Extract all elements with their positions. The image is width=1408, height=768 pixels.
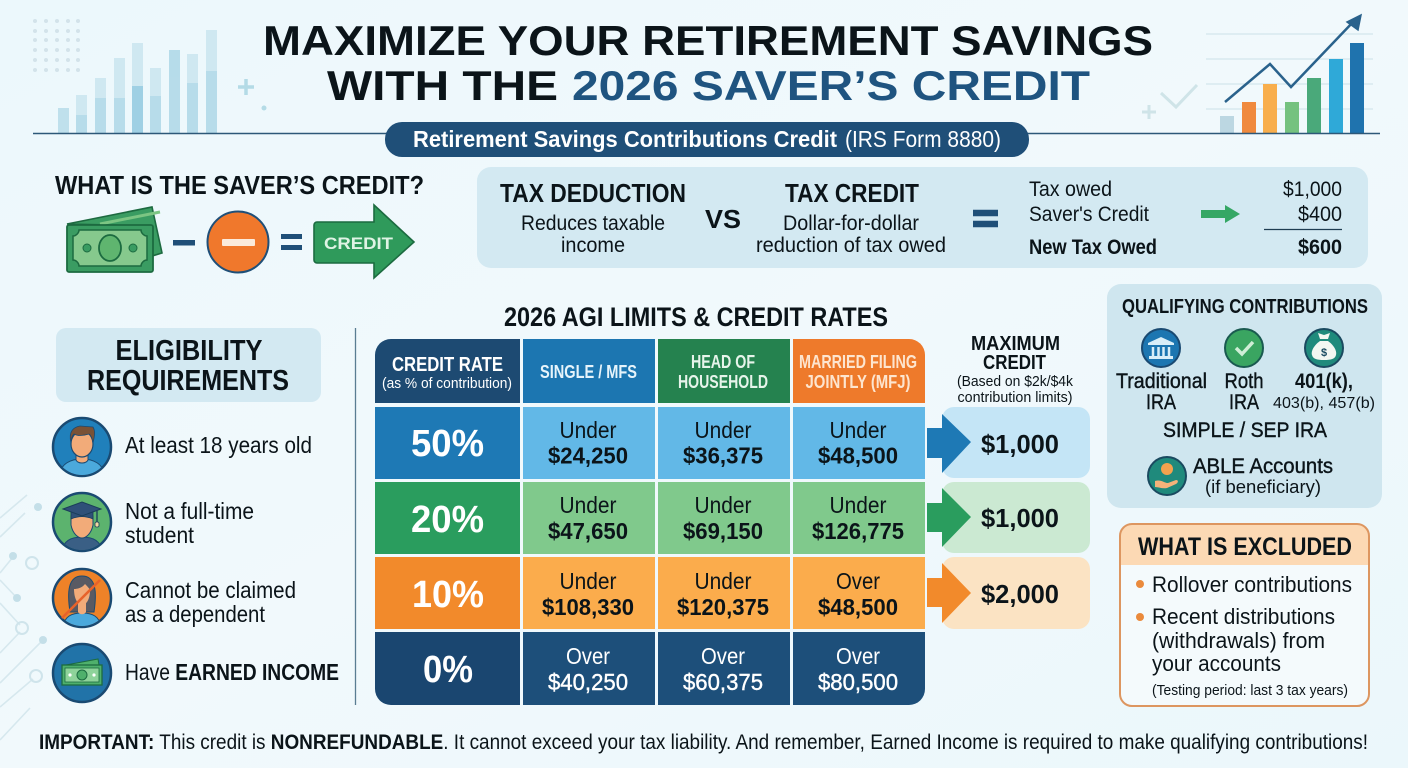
worked example: Saver's Credit: [1029, 203, 1149, 226]
header labels: MARRIED FILING: [799, 352, 917, 372]
maximum credit column heading: MAXIMUM: [971, 333, 1060, 355]
maximum credit: row 20%: $1,000: [981, 503, 1059, 533]
row: 20%: $126,775: [812, 518, 904, 544]
requirement: earned income: [53, 644, 339, 702]
maximum credit: row 50%: $1,000: [981, 429, 1059, 459]
worked example: Tax owed: [1029, 178, 1112, 201]
subtitle pill: (IRS Form 8880): [845, 126, 1001, 152]
header labels: CREDIT RATE: [392, 354, 503, 376]
worked example: [1029, 178, 1342, 259]
contribution labels: IRA: [1146, 391, 1176, 414]
header labels: HEAD OF: [691, 352, 755, 372]
row: 20%: [411, 492, 904, 544]
worked example: $400: [1298, 203, 1342, 226]
icon: money bag: [1305, 329, 1343, 367]
row: 10%: $120,375: [677, 594, 769, 620]
row: 0%: Over: [836, 643, 880, 669]
tax deduction: Reduces taxable: [521, 212, 665, 235]
maximum credit: row 10%: $2,000: [981, 579, 1059, 609]
exclusion list: [1136, 572, 1352, 699]
title: MAXIMIZE YOUR RETIREMENT SAVINGS: [263, 17, 1153, 64]
tax credit: reduction of tax owed: [756, 234, 946, 257]
contribution labels: IRA: [1229, 391, 1259, 414]
row: 20%: Under: [694, 492, 752, 518]
header labels: JOINTLY (MFJ): [806, 372, 910, 392]
row: 50%: Under: [694, 417, 752, 443]
panel: what is excluded: WHAT IS EXCLUDED: [1138, 533, 1352, 561]
panel heading: eligibility: ELIGIBILITY: [116, 335, 262, 367]
contribution labels: SIMPLE / SEP IRA: [1163, 419, 1327, 442]
row: 20%: Under: [830, 492, 887, 518]
tax deduction: income: [561, 234, 625, 257]
requirement: not a student: [53, 493, 254, 552]
tax deduction: [500, 178, 686, 257]
exclusion list: your accounts: [1152, 651, 1281, 676]
able accounts: [1193, 455, 1333, 497]
requirement: earned income: Have EARNED INCOME: [125, 659, 339, 685]
contribution labels: 403(b), 457(b): [1273, 395, 1375, 412]
table header row: [375, 339, 925, 403]
row: 0%: 0%: [423, 649, 473, 691]
maximum credit column heading: CREDIT: [983, 352, 1046, 374]
vs: VS: [705, 204, 741, 234]
exclusion list: Rollover contributions: [1152, 572, 1352, 597]
equals sign: [973, 213, 998, 224]
icon: dependent crossed out: [53, 569, 111, 628]
subtitle pill: Retirement Savings Contributions Credit: [413, 126, 837, 152]
row: 50%: [411, 417, 898, 468]
heading: what is the saver's credit: WHAT IS THE SAVER’S CREDIT?: [55, 170, 424, 200]
row: 50%: Under: [560, 417, 617, 443]
tax credit: TAX CREDIT: [785, 178, 919, 208]
icon: person: [53, 418, 111, 476]
tax deduction: TAX DEDUCTION: [500, 178, 686, 208]
icon: money bag: $: [1321, 347, 1327, 359]
row: 0%: [423, 643, 898, 695]
icon: credit arrow: CREDIT: [324, 234, 394, 253]
row: 10%: [412, 568, 898, 620]
maximum credit: row 20%: [927, 482, 1090, 553]
row: 10%: Under: [694, 568, 752, 594]
icon: bank: [1142, 329, 1180, 367]
icon: banknote: [53, 644, 111, 702]
row: 20%: $69,150: [683, 518, 763, 544]
subtitle pill: [385, 122, 1029, 157]
icon: minus sign: [173, 240, 195, 246]
equation icons: [67, 205, 414, 278]
icon: equals sign: [281, 236, 302, 248]
title: 2026 SAVER’S CREDIT: [572, 62, 1090, 109]
row: 10%: $108,330: [542, 594, 634, 620]
row: 10%: Under: [560, 568, 617, 594]
requirement: age: [53, 418, 312, 476]
contribution labels: Traditional: [1116, 370, 1207, 393]
icon: hand with coin: [1148, 457, 1186, 495]
vertical divider: [354, 328, 356, 705]
title: WITH THE: [327, 62, 558, 109]
maximum credit column heading: (Based on $2k/$4k: [957, 373, 1073, 390]
panel: tax deduction vs credit: [477, 167, 1368, 268]
able accounts: (if beneficiary): [1205, 477, 1321, 497]
decoration: faded bar chart left: [33, 19, 266, 134]
exclusion list: (Testing period: last 3 tax years): [1152, 682, 1348, 699]
title: [263, 17, 1153, 109]
row: 50%: Under: [830, 417, 887, 443]
worked example: $1,000: [1283, 178, 1342, 201]
header labels: HOUSEHOLD: [678, 372, 768, 392]
panel: what is excluded: [1120, 524, 1369, 706]
maximum credit column heading: contribution limits): [958, 389, 1073, 406]
row: 20%: 20%: [411, 499, 484, 541]
header labels: [382, 352, 917, 392]
requirement: age: At least 18 years old: [125, 432, 312, 458]
requirement: not a student: Not a full-time: [125, 498, 254, 524]
panel: qualifying contributions: [1107, 284, 1382, 508]
row: 50%: $36,375: [683, 442, 763, 468]
tax credit: Dollar-for-dollar: [783, 212, 919, 235]
icon: check: [1225, 329, 1263, 367]
row: 20%: $47,650: [548, 518, 628, 544]
worked example: $600: [1298, 236, 1342, 259]
row: 0%: $40,250: [548, 669, 628, 695]
table: AGI limits and credit rates: [375, 339, 925, 705]
header labels: SINGLE / MFS: [540, 362, 637, 382]
maximum credit: row 50%: [927, 407, 1090, 478]
row: 50%: $48,500: [818, 442, 898, 468]
icon: cash: [67, 207, 162, 272]
table heading: 2026 AGI LIMITS & CREDIT RATES: [504, 302, 888, 332]
row: 0%: $80,500: [818, 669, 898, 695]
icon: graduate: [53, 493, 111, 552]
row: 50%: $24,250: [548, 442, 628, 468]
requirement: not a student: student: [125, 522, 195, 548]
exclusion list: Recent distributions: [1152, 604, 1335, 629]
row: 0%: Over: [566, 643, 610, 669]
maximum credit column heading: [957, 333, 1073, 406]
header labels: (as % of contribution): [382, 375, 512, 392]
maximum credit: row 10%: [927, 557, 1090, 629]
tax credit: [756, 178, 946, 257]
panel heading: eligibility: REQUIREMENTS: [87, 365, 289, 397]
row: 0%: Over: [701, 643, 745, 669]
panel heading: eligibility: [56, 328, 321, 402]
row: 0%: $60,375: [683, 669, 763, 695]
exclusion list: (withdrawals) from: [1152, 628, 1325, 653]
row fills: [375, 407, 925, 705]
row: 10%: Over: [836, 568, 880, 594]
row: 50%: 50%: [411, 423, 484, 465]
able accounts: ABLE Accounts: [1193, 455, 1333, 478]
contribution labels: 401(k),: [1295, 370, 1353, 393]
row: 10%: $48,500: [818, 594, 898, 620]
icon: orange minus circle: [208, 212, 268, 272]
row: 10%: 10%: [412, 574, 484, 616]
requirement: not a dependent: Cannot be claimed: [125, 577, 296, 603]
decoration: rising bar chart right: [1142, 15, 1373, 134]
decoration: circuit lines: [0, 495, 47, 740]
requirement: not a dependent: as a dependent: [125, 601, 266, 627]
requirement: not a dependent: [53, 569, 296, 628]
header rule: [33, 132, 1380, 134]
row: 20%: Under: [560, 492, 617, 518]
worked example: New Tax Owed: [1029, 236, 1157, 259]
icon: credit arrow: [314, 205, 414, 278]
icon: green arrow: [1201, 205, 1240, 223]
contribution labels: Roth: [1224, 370, 1264, 393]
contribution labels: [1116, 370, 1375, 442]
